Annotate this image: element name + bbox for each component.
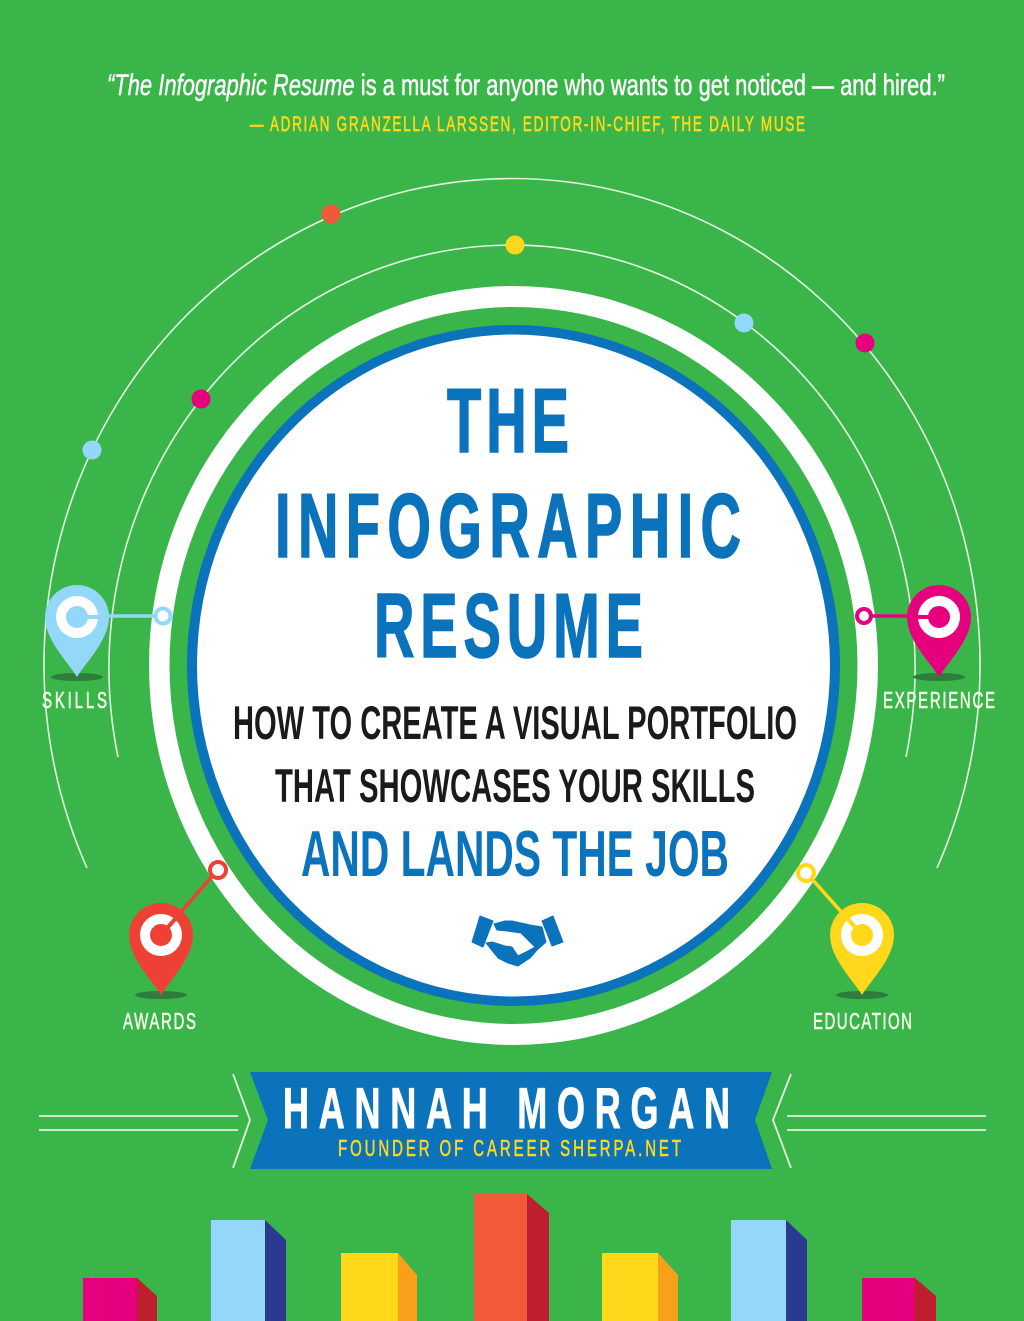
pin: education (798, 865, 894, 999)
author banner: FOUNDER OF CAREER SHERPA.NET (338, 1136, 681, 1162)
pin: experience (857, 585, 971, 681)
endorsement quote: — ADRIAN GRANZELLA LARSSEN, EDITOR-IN-CHIEF, THE DAILY MUSE (250, 112, 805, 136)
pin labels (42, 688, 995, 1035)
book title: THE (447, 370, 569, 471)
arc dots (82, 204, 874, 460)
pin labels: EXPERIENCE (883, 688, 995, 714)
endorsement quote (107, 69, 945, 136)
pin: awards (129, 862, 226, 999)
pin labels: SKILLS (42, 688, 107, 714)
bar chart (83, 1194, 936, 1321)
subtitle: AND LANDS THE JOB (301, 817, 729, 890)
pin labels: EDUCATION (813, 1009, 912, 1035)
banner chevrons and rules (39, 1074, 986, 1168)
subtitle: THAT SHOWCASES YOUR SKILLS (275, 759, 755, 812)
pin: skills (45, 585, 170, 681)
book title: RESUME (374, 575, 643, 676)
central badge (149, 286, 878, 1045)
book title (275, 370, 741, 676)
subtitle (233, 696, 797, 890)
icon: handshake (472, 916, 563, 966)
book title: INFOGRAPHIC (275, 475, 741, 576)
pin labels: AWARDS (123, 1009, 196, 1035)
author banner (250, 1072, 772, 1169)
author banner: HANNAH MORGAN (283, 1078, 730, 1141)
outer arcs (44, 179, 980, 868)
